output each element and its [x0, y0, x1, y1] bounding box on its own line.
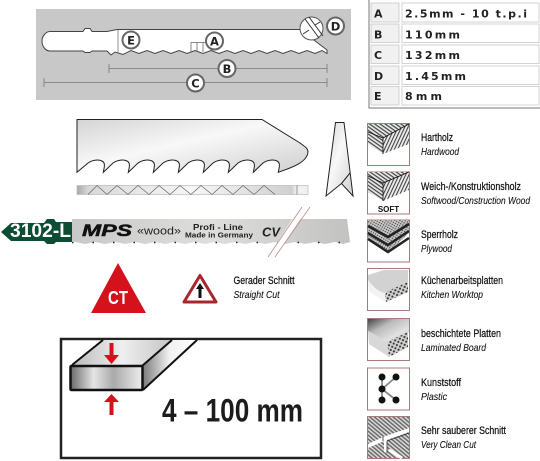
icon: CT red triangle: CT: [108, 288, 128, 308]
blade cross-section: [326, 122, 353, 196]
specification table: A: [374, 8, 383, 20]
model number: 3102-L: [10, 220, 71, 242]
origin: Made in Germany: [185, 230, 254, 240]
label B: [218, 60, 236, 77]
panel: cutting depth: [61, 339, 321, 458]
specification table: 2.5mm - 10 t.p.i: [405, 8, 527, 20]
label B: B: [223, 62, 231, 76]
material: plastic: Plastic: [421, 392, 448, 403]
material: softwood: Weich-/Konstruktionsholz: [421, 181, 521, 193]
icon: plastic molecule: [368, 368, 410, 410]
material: very clean cut: Very Clean Cut: [421, 440, 477, 451]
icon: plywood: [368, 220, 410, 262]
icon: CT red triangle: [91, 263, 146, 313]
icon: hardwood: [368, 124, 410, 166]
label A: A: [210, 34, 219, 48]
text: straight cut: Straight Cut: [234, 290, 280, 301]
material: hardwood: Hardwood: [421, 147, 460, 158]
line name: Profi - Line: [193, 222, 243, 232]
panel: blade dimension diagram: [36, 9, 351, 100]
blade body: [72, 219, 350, 244]
specification table: 110mm: [405, 28, 460, 42]
tooth pitch marker: [191, 42, 208, 52]
material: laminated board: Laminated Board: [421, 343, 487, 354]
text: straight cut: Gerader Schnitt: [234, 275, 295, 287]
material: hardwood: [368, 124, 460, 166]
workpiece: [70, 340, 197, 390]
material: plywood: [368, 220, 458, 262]
icon: clean cut: [368, 416, 410, 458]
material: hardwood: Hartholz: [421, 132, 453, 144]
icon: softwood: [368, 172, 410, 214]
material: plastic: Kunststoff: [421, 377, 461, 389]
material: plastic: [368, 368, 461, 410]
icon: straight cut triangle: [184, 276, 216, 302]
label C: [187, 74, 204, 92]
icon: softwood: SOFT: [378, 205, 399, 214]
long product blade: [1, 207, 350, 257]
icon: kitchen worktop: [368, 268, 410, 310]
label D: [327, 18, 344, 34]
material: kitchen worktop: Kitchen Worktop: [421, 290, 483, 301]
break gap: [276, 218, 301, 245]
specification table: 132mm: [405, 49, 460, 62]
wood label: «wood»: [137, 226, 181, 238]
specification table: D: [374, 70, 383, 83]
enlarged tooth profile: [77, 120, 308, 172]
specification table: C: [374, 49, 382, 62]
thickness detail circle: [300, 17, 323, 40]
label E: E: [127, 34, 135, 48]
label A: [206, 32, 223, 50]
specification table: E: [374, 90, 382, 103]
material: laminated board: [368, 318, 501, 360]
icon: laminated board: [368, 318, 410, 360]
dimension line C: [44, 78, 327, 87]
steel type: CV: [262, 224, 281, 240]
text: straight cut: [234, 275, 295, 301]
material: very clean cut: Sehr sauberer Schnitt: [421, 425, 506, 437]
specification table: B: [374, 28, 382, 42]
brand logo: MPS: [82, 221, 133, 240]
dimension line B: [109, 64, 327, 73]
label D: D: [331, 20, 340, 34]
blade set strip: [77, 186, 308, 194]
depth range: 4 – 100 mm: [162, 392, 303, 428]
material: very clean cut: [368, 416, 506, 458]
label C: C: [191, 76, 200, 90]
material: softwood: [368, 172, 531, 214]
blade outline: [42, 28, 327, 55]
arrow: down: [104, 343, 119, 364]
material: kitchen worktop: [368, 268, 503, 310]
green shank: [1, 219, 72, 244]
material: plywood: Sperrholz: [421, 229, 458, 241]
label E: [122, 32, 140, 48]
arrow: up: [104, 394, 119, 415]
specification table: 1.45mm: [405, 70, 466, 83]
material: plywood: Plywood: [421, 244, 453, 255]
material: laminated board: beschichtete Platten: [421, 328, 501, 340]
break marks: [268, 207, 310, 257]
specification table: [369, 0, 540, 108]
specification table: 8mm: [405, 90, 442, 103]
material: kitchen worktop: Küchenarbeitsplatten: [421, 275, 503, 287]
